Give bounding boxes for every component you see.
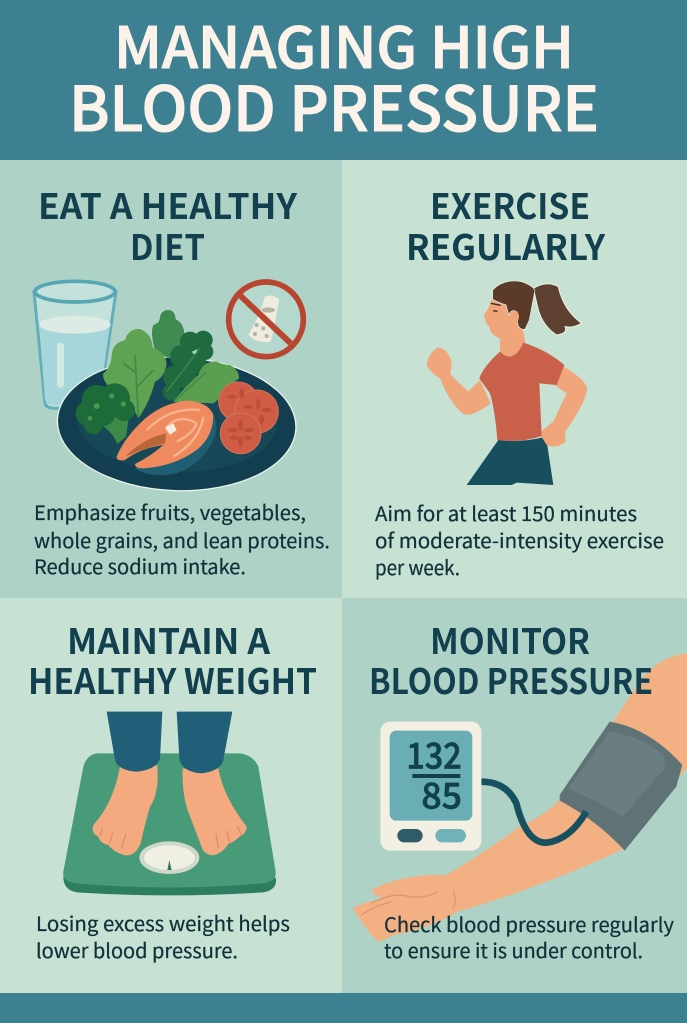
illustration: arm with cuff and monitor: [353, 653, 687, 942]
heading: eat a healthy diet: DIET: [130, 220, 205, 271]
arm and hand: [353, 653, 687, 942]
title: [69, 3, 599, 149]
heading: eat a healthy diet: [38, 179, 298, 271]
trousers: [467, 437, 553, 485]
text: diet advice: Emphasize fruits, vegetables,: [34, 497, 306, 526]
heading: monitor blood pressure: MONITOR: [430, 614, 590, 665]
heading: maintain a healthy weight: [28, 614, 317, 705]
title: MANAGING HIGH: [114, 3, 574, 85]
text: exercise advice: [375, 498, 664, 581]
scale dial: [139, 841, 199, 874]
panel: maintain a healthy weight: [0, 598, 342, 993]
eye and brow: [491, 303, 501, 311]
hair: [493, 281, 535, 329]
ponytail: [533, 284, 582, 335]
icon: leafy greens: [103, 310, 239, 418]
text: monitoring advice: to ensure it is under control.: [384, 935, 643, 964]
icon: tomato slices: [219, 382, 278, 454]
text: diet advice: Reduce sodium intake.: [34, 551, 246, 580]
illustration: feet on scale: [63, 712, 276, 895]
heading: maintain a healthy weight: HEALTHY WEIGHT: [28, 654, 317, 705]
back arm: [539, 367, 587, 447]
icon: plate: [54, 353, 299, 495]
text: weight advice: lower blood pressure.: [36, 935, 238, 964]
icon: no salt sign: [229, 282, 303, 357]
text: exercise advice: per week.: [375, 552, 460, 581]
reading: 132 over 85: 132: [406, 728, 462, 779]
reading: 132 over 85: 85: [421, 769, 462, 820]
heading: exercise regularly: [406, 179, 606, 271]
heading: monitor blood pressure: [369, 614, 653, 705]
icon: glass of water: [34, 281, 116, 408]
text: weight advice: [36, 908, 290, 964]
front arm and fist: [427, 348, 491, 415]
blood pressure cuff: [560, 722, 682, 851]
reading: 132 over 85: [406, 728, 462, 820]
heading: monitor blood pressure: BLOOD PRESSURE: [369, 654, 653, 705]
neck and face: [484, 293, 525, 357]
panel: monitor blood pressure: [342, 598, 687, 993]
title: BLOOD PRESSURE: [69, 59, 599, 149]
trouser legs: [107, 712, 232, 773]
text: diet advice: whole grains, and lean proteins.: [34, 525, 330, 554]
text: diet advice: [34, 497, 330, 580]
text: monitoring advice: [384, 909, 675, 964]
heading: maintain a healthy weight: MAINTAIN A: [67, 614, 271, 665]
monitor device: [380, 722, 481, 851]
header banner: [0, 0, 687, 160]
text: exercise advice: of moderate-intensity exercise: [375, 525, 664, 554]
ear: [511, 311, 519, 323]
footer band: [0, 993, 687, 1023]
cuff tube: [481, 782, 586, 843]
illustration: woman running: [427, 281, 587, 485]
bathroom scale: [63, 753, 276, 895]
text: monitoring advice: Check blood pressure regularly: [384, 909, 675, 938]
panel: eat a healthy diet: [0, 160, 342, 598]
text: exercise advice: Aim for at least 150 minutes: [375, 498, 637, 527]
heading: exercise regularly: REGULARLY: [406, 220, 606, 271]
bare feet: [93, 765, 247, 855]
text: weight advice: Losing excess weight helps: [36, 908, 290, 937]
icon: broccoli: [76, 383, 135, 444]
heading: eat a healthy diet: EAT A HEALTHY: [38, 179, 298, 230]
icon: salmon fillet: [117, 401, 216, 475]
heading: exercise regularly: EXERCISE: [430, 179, 590, 230]
shirt: [479, 343, 564, 441]
illustration: healthy meal: [34, 281, 303, 495]
panel: exercise regularly: [342, 160, 687, 598]
monitor buttons: [397, 829, 466, 842]
